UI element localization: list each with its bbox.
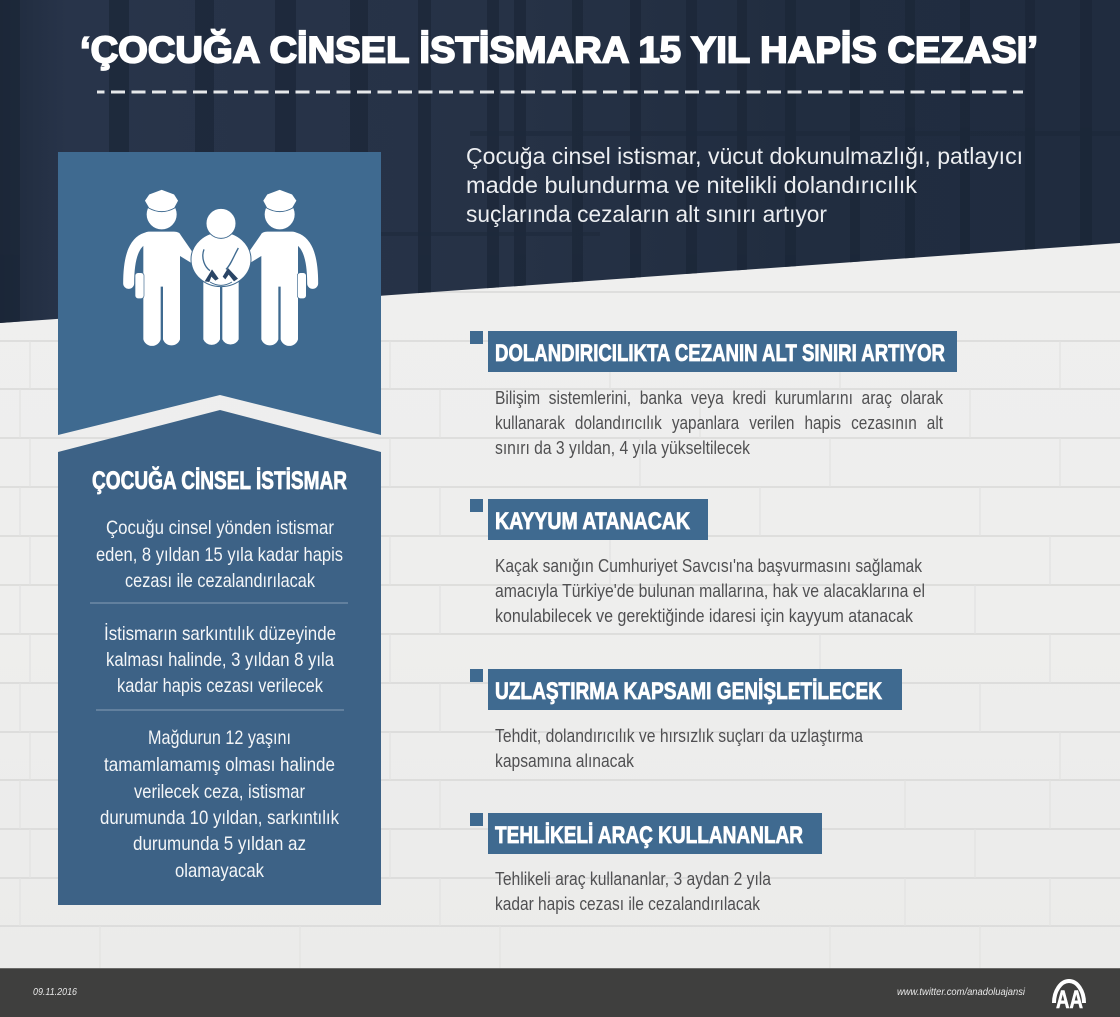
fact: 3 to 8 years: İstismarın sarkıntılık düzeyinde	[104, 622, 336, 645]
fact: 3 to 8 years: kalması halinde, 3 yıldan 8 yıla	[106, 649, 334, 671]
section: fraud: Bilişim sistemlerini, banka veya kredi kurumlarını araç olarak	[495, 387, 944, 408]
icon: agency logo	[1054, 981, 1084, 1014]
fact: victim under 12: Mağdurun 12 yaşını	[148, 727, 291, 749]
date: 09.11.2016	[33, 987, 77, 998]
section: trustee	[470, 499, 925, 626]
section: mediation: Tehdit, dolandırıcılık ve hırsızlık suçları da uzlaştırma	[495, 725, 864, 746]
fact: 8 to 15 years: cezası ile cezalandırılacak	[125, 570, 315, 592]
fact: victim under 12: verilecek ceza, istismar	[134, 781, 305, 803]
panel: police icon ribbon	[58, 152, 381, 435]
panel heading: ÇOCUĞA CİNSEL İSTİSMAR	[92, 466, 347, 495]
section: trustee: amacıyla Türkiye'de bulunan mallarına, hak ve alacaklarına el	[495, 580, 925, 601]
icon: agency logo: AA	[1056, 986, 1083, 1014]
fact: 3 to 8 years: kadar hapis cezası verilecek	[117, 675, 323, 697]
source link: www.twitter.com/anadoluajansi	[897, 987, 1026, 998]
icon: left officer	[129, 189, 192, 346]
intro text: Çocuğa cinsel istismar, vücut dokunulmazlığı, patlayıcı	[466, 143, 1023, 169]
section: trustee: Kaçak sanığın Cumhuriyet Savcısı'na başvurmasını sağlamak	[495, 555, 923, 576]
fact: victim under 12: durumunda 5 yıldan az	[133, 833, 306, 855]
fact: 8 to 15 years: Çocuğu cinsel yönden istismar	[106, 517, 334, 539]
fact: victim under 12: olamayacak	[175, 860, 264, 882]
fact: victim under 12: tamamlamamış olması halinde	[104, 754, 335, 776]
section: fraud	[470, 331, 957, 458]
section: fraud: DOLANDIRICILIKTA CEZANIN ALT SINIRI ARTIYOR	[495, 340, 945, 367]
fact: victim under 12: durumunda 10 yıldan, sarkıntılık	[100, 807, 339, 829]
icon: detainee with handcuffs	[191, 208, 251, 345]
section: mediation	[470, 669, 902, 771]
panel: child sexual abuse facts	[58, 410, 381, 905]
section: mediation: UZLAŞTIRMA KAPSAMI GENİŞLETİLECEK	[495, 678, 882, 705]
section: trustee: konulabilecek ve gerektiğinde idaresi için kayyum atanacak	[495, 605, 914, 626]
intro text: madde bulundurma ve nitelikli dolandırıcılık	[466, 172, 917, 198]
section: fraud: sınırı da 3 yıldan, 4 yıla yükseltilecek	[495, 437, 751, 458]
fact: 8 to 15 years	[96, 517, 343, 592]
section: fraud: kullanarak dolandırıcılık yapanlara verilen hapis cezasının alt	[495, 412, 943, 433]
title: ‘ÇOCUĞA CİNSEL İSTİSMARA 15 YIL HAPİS CEZASI’	[80, 28, 1038, 70]
section: dangerous vehicle use: Tehlikeli araç kullananlar, 3 aydan 2 yıla	[495, 868, 772, 889]
section: mediation: kapsamına alınacak	[495, 750, 635, 771]
icon: two officers escorting a detainee	[129, 189, 313, 346]
icon: right officer	[249, 189, 313, 346]
fact: victim under 12	[100, 727, 339, 882]
section: dangerous vehicle use: TEHLİKELİ ARAÇ KULLANANLAR	[495, 822, 803, 849]
background: dark prison bars band	[0, 0, 1120, 330]
fact: 3 to 8 years	[104, 622, 336, 697]
section: dangerous vehicle use: kadar hapis cezası ile cezalandırılacak	[495, 893, 761, 914]
intro text: suçlarında cezaların alt sınırı artıyor	[466, 201, 827, 227]
fact: 8 to 15 years: eden, 8 yıldan 15 yıla kadar hapis	[96, 544, 343, 566]
intro text	[466, 143, 1023, 227]
footer bar	[0, 968, 1120, 1017]
section: dangerous vehicle use	[470, 813, 822, 914]
section: trustee: KAYYUM ATANACAK	[495, 508, 690, 535]
